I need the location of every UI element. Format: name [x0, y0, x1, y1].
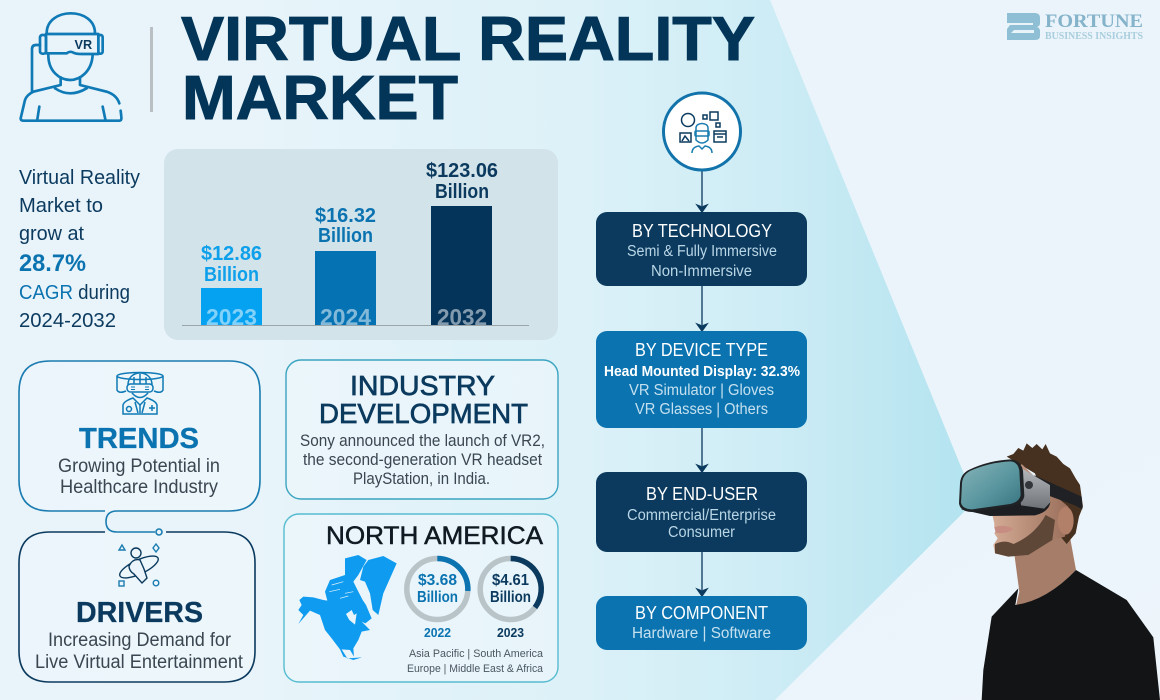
hair	[1007, 443, 1083, 544]
headset rim	[959, 459, 1024, 512]
title	[181, 5, 755, 133]
beard	[995, 515, 1055, 557]
segment: by technology: Semi & Fully Immersive	[627, 243, 777, 260]
panel: north america	[284, 514, 558, 682]
segment: by device type	[596, 331, 807, 428]
CAGR text block	[19, 167, 140, 332]
icon: segmentation circle	[664, 93, 740, 170]
panel: drivers: DRIVERS	[76, 597, 203, 629]
photo: man wearing VR headset	[959, 443, 1160, 700]
segment: by device type: BY DEVICE TYPE	[635, 340, 768, 360]
panel: drivers: Live Virtual Entertainment	[35, 652, 244, 673]
logo: Fortune Business Insights: BUSINESS INSIGHTS	[1045, 31, 1143, 42]
CAGR text block: Market to	[19, 195, 103, 217]
CAGR text block: 2024-2032	[19, 310, 116, 332]
headset foam	[961, 497, 1050, 516]
logo: Fortune Business Insights: FORTUNE	[1045, 11, 1143, 32]
headset lens	[961, 461, 1021, 509]
donut 2022: $3.68	[418, 572, 457, 589]
bar 2023: $12.86	[201, 242, 262, 265]
panel: industry development: Sony announced the launch of VR2,	[300, 432, 545, 450]
panel: trends: Growing Potential in	[58, 456, 220, 477]
segment: by component: Hardware | Software	[632, 625, 771, 642]
head details	[959, 443, 1083, 557]
bar 2024: $16.32	[315, 204, 376, 227]
bar 2023	[201, 242, 262, 330]
face	[992, 464, 1068, 557]
connector between trends and drivers	[106, 511, 162, 535]
title: MARKET	[182, 64, 458, 133]
panel: trends	[19, 361, 260, 511]
segment: by technology: BY TECHNOLOGY	[632, 221, 772, 241]
title divider	[150, 27, 153, 112]
ear	[1058, 507, 1074, 535]
panel: trends: Healthcare Industry	[60, 477, 218, 498]
logo: Fortune Business Insights	[1007, 11, 1143, 42]
CAGR text block: 28.7%	[19, 250, 86, 277]
donut 2022	[407, 558, 468, 640]
t-shirt	[982, 570, 1160, 700]
headset body	[1018, 466, 1050, 509]
segment: by end-user: BY END-USER	[646, 484, 758, 504]
donut 2022: Billion	[417, 589, 458, 606]
donut 2023: $4.61	[492, 572, 529, 589]
segment: by component	[596, 596, 807, 650]
panel: north america: NORTH AMERICA	[326, 522, 543, 550]
arrows between segments	[697, 170, 707, 596]
CAGR text block: CAGR during	[19, 282, 130, 304]
bar 2032: Billion	[435, 180, 489, 203]
icon: floating VR user	[117, 544, 161, 586]
segment: by end-user	[596, 472, 807, 552]
bar 2024: Billion	[318, 224, 373, 247]
other regions: Europe | Middle East & Africa	[407, 663, 544, 675]
panel: industry development	[286, 360, 558, 499]
headset strap	[1034, 475, 1082, 509]
icon: VR headset user: VR	[75, 38, 92, 52]
panel: bar chart	[164, 149, 558, 340]
donut 2023: 2023	[497, 626, 524, 640]
bar 2024: 2024	[320, 304, 371, 330]
icon: VR doctor	[117, 372, 163, 414]
panel: industry development: PlayStation, in India.	[353, 470, 490, 488]
segment: by device type: VR Glasses | Others	[635, 401, 768, 418]
bar 2024	[315, 204, 376, 330]
bar 2023: Billion	[204, 263, 259, 286]
icon: VR headset user	[21, 13, 121, 121]
neck	[1014, 533, 1076, 606]
segment: by component: BY COMPONENT	[635, 603, 768, 623]
map: North America	[298, 555, 397, 660]
segment: by device type: VR Simulator | Gloves	[629, 382, 774, 399]
panel: trends: TRENDS	[79, 423, 199, 455]
donut 2023: Billion	[490, 589, 531, 606]
CAGR text block: grow at	[19, 223, 84, 245]
other regions	[407, 648, 544, 675]
bar 2032: 2032	[437, 304, 487, 330]
panel: drivers	[19, 532, 255, 682]
segment: by end-user: Consumer	[668, 524, 735, 541]
lips	[994, 526, 1014, 533]
headset knob	[1025, 481, 1033, 489]
segment: by end-user: Commercial/Enterprise	[627, 507, 776, 524]
donut 2023	[480, 558, 541, 640]
bar 2023: 2023	[206, 304, 257, 330]
bar 2032: $123.06	[426, 159, 498, 182]
donut 2022: 2022	[424, 626, 451, 640]
panel: industry development: INDUSTRY	[350, 370, 495, 401]
bar 2032	[426, 159, 498, 330]
segment: by technology	[596, 212, 807, 286]
CAGR text block: Virtual Reality	[19, 167, 140, 189]
segment: by device type: Head Mounted Display: 32.3%	[604, 363, 800, 380]
segment: by technology: Non-Immersive	[651, 263, 752, 280]
other regions: Asia Pacific | South America	[409, 648, 544, 660]
panel: industry development: the second-generation VR headset	[303, 451, 542, 469]
panel: drivers: Increasing Demand for	[48, 630, 232, 651]
title: VIRTUAL REALITY	[181, 5, 755, 74]
panel: industry development: DEVELOPMENT	[319, 398, 528, 429]
